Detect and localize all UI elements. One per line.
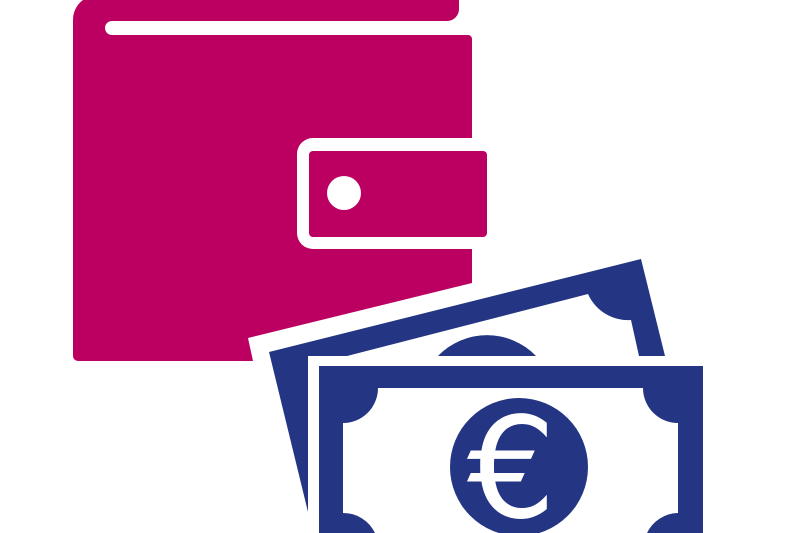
icon: wallet — [73, 0, 490, 361]
wallet clasp — [309, 151, 487, 237]
wallet clasp button — [327, 176, 361, 210]
icon: back banknote — [269, 259, 665, 512]
wallet clasp outline — [297, 138, 490, 249]
front note frame — [319, 366, 703, 533]
icon: front banknote — [319, 366, 703, 533]
euro medallion — [450, 398, 588, 533]
back note frame — [269, 259, 665, 512]
wallet body — [73, 0, 472, 361]
back note medallion — [438, 335, 536, 356]
